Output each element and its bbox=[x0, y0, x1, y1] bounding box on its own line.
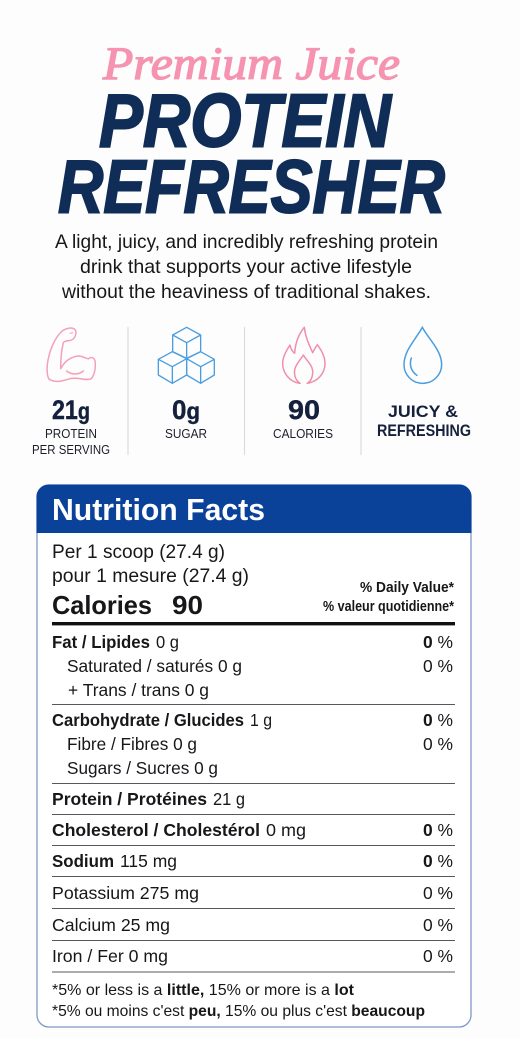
row: sodium: Sodium bbox=[52, 851, 114, 871]
row: calcium: 0 % bbox=[423, 915, 453, 935]
script subtitle: Premium Juice bbox=[102, 38, 400, 90]
row: iron: 0 % bbox=[423, 946, 453, 966]
stat: sugar bbox=[158, 327, 214, 441]
footnote: *5% ou moins c'est peu, 15% ou plus c'est beaucoup bbox=[52, 1003, 425, 1020]
label: SUGAR bbox=[165, 426, 207, 441]
stat: calories bbox=[273, 327, 333, 441]
row: potassium: 0 % bbox=[423, 883, 453, 903]
row: protein: Protein / Protéines bbox=[52, 789, 207, 809]
daily value heading bbox=[323, 580, 454, 615]
daily value heading: % Daily Value* bbox=[360, 580, 454, 596]
row: saturated: 0 % bbox=[423, 656, 453, 676]
value: 21g bbox=[52, 395, 90, 425]
row: sodium bbox=[52, 851, 453, 871]
row: fat: 0 g bbox=[156, 632, 179, 652]
icon: water drop bbox=[404, 327, 442, 383]
description text: drink that supports your active lifestyle bbox=[80, 256, 412, 278]
row: potassium: Potassium 275 mg bbox=[52, 883, 199, 903]
row: fibre: Fibre / Fibres 0 g bbox=[67, 734, 197, 754]
headline line 1: PROTEIN bbox=[99, 78, 393, 162]
row: protein: 21 g bbox=[213, 789, 245, 809]
label line 2: PER SERVING bbox=[32, 442, 110, 457]
panel heading: Nutrition Facts bbox=[52, 492, 265, 527]
headline line 2: REFRESHER bbox=[58, 144, 445, 228]
row: fibre bbox=[67, 734, 453, 754]
description text: without the heaviness of traditional shakes. bbox=[61, 281, 431, 303]
label: CALORIES bbox=[273, 426, 333, 441]
row: cholesterol: 0 % bbox=[423, 820, 453, 840]
row: cholesterol: 0 mg bbox=[266, 820, 306, 840]
label line 1: JUICY & bbox=[388, 403, 458, 421]
row: fibre: 0 % bbox=[423, 734, 453, 754]
title block bbox=[58, 38, 445, 228]
stat: juicy and refreshing bbox=[377, 327, 471, 440]
icon: sugar cubes bbox=[158, 327, 214, 383]
row: sodium: 115 mg bbox=[120, 851, 177, 871]
row: fat: 0 % bbox=[423, 632, 453, 652]
label: PROTEIN bbox=[45, 426, 97, 441]
row: carbohydrate: 1 g bbox=[250, 710, 272, 730]
value: 0g bbox=[172, 395, 200, 425]
stat: protein bbox=[32, 328, 110, 457]
row: potassium bbox=[52, 883, 453, 903]
footnote: *5% or less is a little, 15% or more is a lot bbox=[52, 982, 355, 999]
calories: Calories bbox=[52, 590, 152, 620]
icon: flame bbox=[283, 327, 325, 383]
serving size: pour 1 mesure (27.4 g) bbox=[52, 565, 249, 587]
row: carbohydrate: 0 % bbox=[423, 710, 453, 730]
footnote bbox=[52, 982, 425, 1020]
description text: A light, juicy, and incredibly refreshing protein bbox=[55, 231, 438, 253]
row: fat bbox=[52, 632, 453, 652]
calories: 90 bbox=[172, 590, 203, 620]
icon: flexed arm bbox=[47, 328, 95, 381]
row: cholesterol bbox=[52, 820, 453, 840]
label line 2: REFRESHING bbox=[377, 422, 471, 440]
row: iron: Iron / Fer 0 mg bbox=[52, 946, 168, 966]
row: saturated: Saturated / saturés 0 g bbox=[67, 656, 242, 676]
row: carbohydrate: Carbohydrate / Glucides bbox=[52, 710, 244, 730]
daily value heading: % valeur quotidienne* bbox=[323, 599, 454, 615]
row: calcium: Calcium 25 mg bbox=[52, 915, 170, 935]
value: 90 bbox=[288, 395, 320, 425]
row: cholesterol: Cholesterol / Cholestérol bbox=[52, 820, 260, 840]
panel header bbox=[36, 484, 472, 533]
description text bbox=[55, 231, 438, 303]
serving size bbox=[52, 541, 249, 587]
panel: nutrition facts bbox=[36, 484, 472, 1027]
row: sugars: Sugars / Sucres 0 g bbox=[67, 758, 218, 778]
row: calcium bbox=[52, 915, 453, 935]
serving size: Per 1 scoop (27.4 g) bbox=[52, 541, 225, 563]
calories bbox=[52, 590, 203, 620]
row: saturated bbox=[67, 656, 453, 676]
row: iron bbox=[52, 946, 453, 966]
row: fat: Fat / Lipides bbox=[52, 632, 150, 652]
panel background bbox=[37, 485, 471, 1027]
row: sodium: 0 % bbox=[423, 851, 453, 871]
row: carbohydrate bbox=[52, 710, 453, 730]
row: trans: + Trans / trans 0 g bbox=[68, 680, 209, 700]
